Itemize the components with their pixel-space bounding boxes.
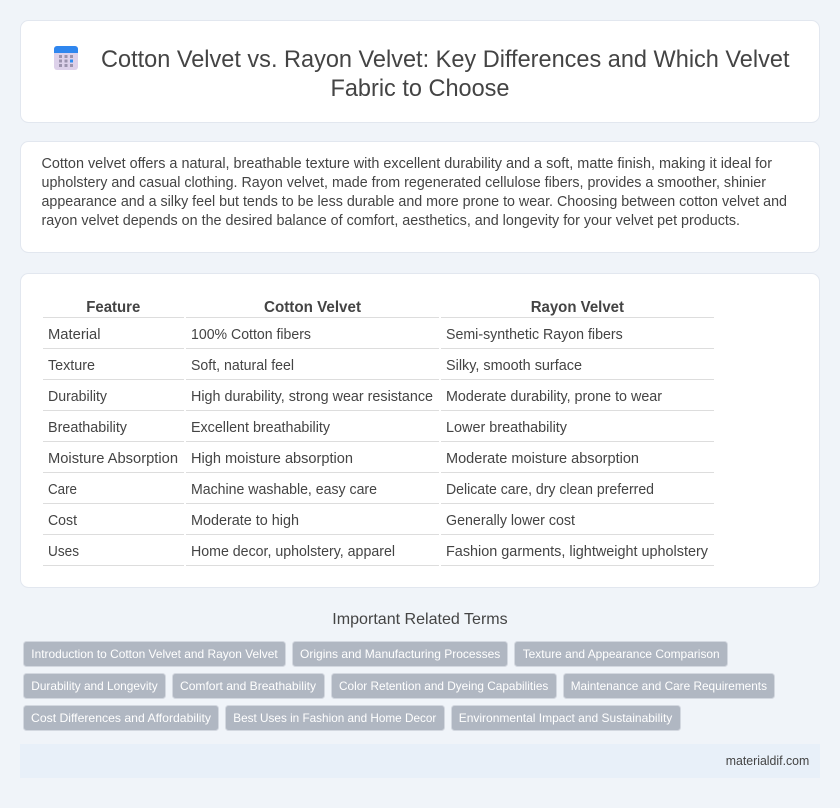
tag: Cost Differences and Affordability — [31, 711, 211, 725]
table row: care: Care — [48, 482, 77, 498]
table row: texture: Soft, natural feel — [191, 358, 294, 374]
title: Fabric to Choose — [330, 75, 510, 102]
title: Cotton Velvet vs. Rayon Velvet: Key Differences and Which Velvet — [101, 46, 790, 73]
table row: breathability: Excellent breathability — [191, 420, 331, 436]
table row: texture — [48, 358, 582, 374]
table row: material — [48, 327, 623, 343]
table header — [86, 299, 625, 316]
table row: uses — [48, 544, 709, 560]
text block: intro: rayon velvet depends on the desired balance of comfort, aesthetics, and longevity for your velvet pet products. — [42, 213, 740, 229]
table row: breathability: Lower breathability — [446, 420, 568, 436]
table row: cost: Generally lower cost — [446, 513, 575, 529]
panel: comparison table — [20, 274, 820, 588]
heading: important related terms: Important Related Terms — [332, 611, 508, 628]
table row: texture: Silky, smooth surface — [446, 358, 582, 374]
tag: Comfort and Breathability — [180, 679, 316, 693]
table row: cost — [48, 513, 575, 529]
tag — [24, 706, 218, 730]
tag — [292, 642, 508, 666]
text block: intro — [42, 156, 787, 229]
tag — [452, 706, 680, 730]
tag: Origins and Manufacturing Processes — [300, 647, 500, 661]
footer source: materialdif.com — [726, 753, 809, 768]
table header: Cotton Velvet — [264, 299, 362, 316]
table row: durability: High durability, strong wear resistance — [191, 389, 433, 405]
tag — [226, 706, 444, 730]
panel: title header — [20, 20, 820, 122]
table row: cost: Moderate to high — [191, 513, 299, 529]
table row: material: Material — [48, 327, 100, 343]
tag: Maintenance and Care Requirements — [571, 679, 767, 693]
tag — [332, 674, 556, 698]
table row: uses: Fashion garments, lightweight upholstery — [446, 544, 709, 560]
table row: uses: Uses — [48, 544, 79, 560]
table header: Rayon Velvet — [531, 299, 625, 316]
table header: Feature — [86, 299, 140, 316]
tag: Color Retention and Dyeing Capabilities — [339, 679, 548, 693]
tag: Environmental Impact and Sustainability — [459, 711, 672, 725]
table row: care — [48, 482, 654, 498]
table row: breathability — [48, 420, 568, 436]
table row: care: Machine washable, easy care — [191, 482, 377, 498]
tag — [24, 642, 286, 666]
table row: cost: Cost — [48, 513, 77, 529]
table row: durability — [48, 389, 662, 405]
table row: durability: Moderate durability, prone to wear — [446, 389, 662, 405]
footer bar — [20, 744, 820, 778]
table row: moisture absorption: Moisture Absorption — [48, 451, 178, 467]
tag: Introduction to Cotton Velvet and Rayon Velvet — [31, 647, 278, 661]
tag — [172, 674, 324, 698]
table row: durability: Durability — [48, 389, 108, 405]
table row: material: Semi-synthetic Rayon fibers — [446, 327, 623, 343]
text block: intro: appearance and a silky feel but tends to be less durable and more prone to wear. Choosing between cotton velvet and — [42, 194, 787, 210]
tag — [514, 642, 728, 666]
table row: uses: Home decor, upholstery, apparel — [191, 544, 395, 560]
table row: texture: Texture — [48, 358, 95, 374]
tag — [564, 674, 774, 698]
tag: Best Uses in Fashion and Home Decor — [233, 711, 436, 725]
title — [101, 46, 790, 102]
table row: material: 100% Cotton fibers — [191, 327, 311, 343]
tag: Texture and Appearance Comparison — [523, 647, 720, 661]
table row: care: Delicate care, dry clean preferred — [446, 482, 654, 498]
icon: calendar — [54, 46, 78, 70]
tag list: related terms — [24, 642, 774, 730]
text block: intro: Cotton velvet offers a natural, breathable texture with excellent durability and a soft, matte finish, making it ideal for — [42, 156, 772, 172]
tag — [24, 674, 166, 698]
table row: moisture absorption — [48, 451, 639, 467]
table row: breathability: Breathability — [48, 420, 128, 436]
table row: moisture absorption: Moderate moisture absorption — [446, 451, 639, 467]
tag: Durability and Longevity — [31, 679, 158, 693]
panel: intro paragraph — [20, 142, 820, 252]
text block: intro: upholstery and casual clothing. Rayon velvet, made from regenerated cellulose fibers, provides a smoother, shinier — [42, 175, 766, 191]
table row: moisture absorption: High moisture absorption — [191, 451, 353, 467]
